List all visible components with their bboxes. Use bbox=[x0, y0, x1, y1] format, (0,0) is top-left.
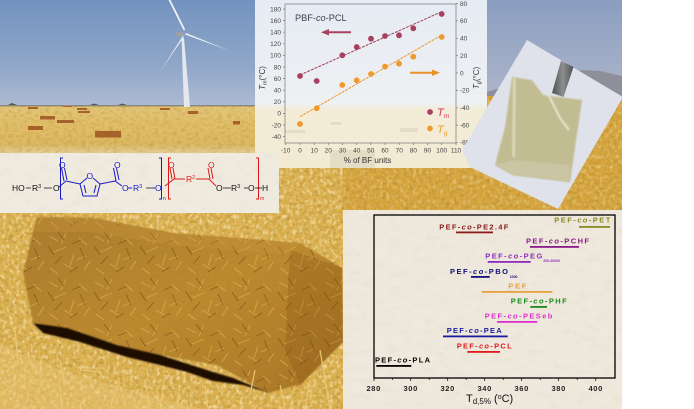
left axis labels: -20 bbox=[272, 122, 281, 129]
structure: right end group: 3 bbox=[237, 184, 240, 190]
legend: Tm: m bbox=[444, 113, 450, 120]
left axis labels: 40 bbox=[274, 88, 281, 94]
structure: left end group: O bbox=[53, 183, 60, 193]
right axis labels: 80 bbox=[460, 1, 468, 8]
x axis labels bbox=[281, 148, 462, 154]
structure: blue furan repeat unit: O bbox=[155, 183, 162, 193]
series: PEF-co-PHF: PEF-co-PHF bbox=[511, 296, 567, 305]
series: PEF-co-PEA bbox=[443, 326, 508, 337]
structure: right end group: O bbox=[248, 183, 255, 193]
structure: black bonds bbox=[26, 187, 248, 189]
left axis labels: 120 bbox=[270, 41, 281, 48]
legend: Tm bbox=[427, 107, 450, 120]
structure: left end group: HO bbox=[12, 183, 25, 193]
left axis labels: 160 bbox=[270, 18, 281, 25]
structure: right end group: O bbox=[216, 183, 223, 193]
x axis tick labels: 320 bbox=[441, 384, 455, 393]
legend: Tg: T bbox=[437, 124, 444, 136]
left axis labels: 20 bbox=[274, 99, 281, 106]
x axis labels: 10 bbox=[311, 148, 318, 154]
photo: lower straw ground bbox=[0, 168, 343, 409]
structure: red aliphatic repeat unit: O bbox=[208, 160, 215, 170]
structure: blue furan repeat unit bbox=[59, 158, 166, 202]
right axis labels: 20 bbox=[460, 53, 468, 60]
structure: red aliphatic repeat unit: 2 bbox=[192, 175, 195, 181]
data points: Tm bbox=[297, 11, 445, 84]
series: PEF-co-PESeb: PEF-co-PESeb bbox=[485, 312, 553, 321]
x axis labels: 0 bbox=[298, 148, 302, 154]
structure: right end group: H bbox=[262, 183, 268, 193]
right axis labels: 60 bbox=[460, 18, 468, 25]
photo: far field bbox=[0, 106, 256, 154]
structure: blue furan repeat unit: O bbox=[59, 160, 66, 170]
series: PEF-co-PLA: PEF-co-PLA bbox=[375, 355, 431, 364]
structure: left end group: R bbox=[32, 183, 38, 193]
x axis tick labels: 340 bbox=[478, 384, 492, 393]
structure: red aliphatic repeat unit: R bbox=[186, 174, 192, 184]
structure: left end group: 3 bbox=[38, 184, 41, 190]
structure: blue furan repeat unit: R bbox=[133, 183, 139, 193]
x axis tick labels: 280 bbox=[367, 384, 381, 393]
photo: right and middle field bbox=[343, 96, 622, 210]
clip holder bbox=[552, 61, 574, 97]
faint field marks bbox=[285, 122, 418, 168]
series: PEF-co-PE2.4F: PEF-co-PE2.4F bbox=[439, 222, 509, 231]
right axis labels: -60 bbox=[460, 122, 470, 129]
structure: blue furan repeat unit: O bbox=[114, 160, 121, 170]
panel: melting and glass transition chart bbox=[255, 0, 487, 168]
series: PEF-co-PEG: PEF-co-PEG bbox=[485, 251, 542, 260]
left axis title: (°C) bbox=[258, 66, 267, 80]
x axis labels: 90 bbox=[424, 148, 431, 154]
hay bale bbox=[20, 215, 345, 395]
x axis title: C) bbox=[502, 393, 513, 405]
series: PEF-co-PEG bbox=[485, 251, 560, 263]
x axis tick labels bbox=[367, 384, 603, 393]
x axis tick labels: 300 bbox=[404, 384, 418, 393]
x axis labels: 100 bbox=[436, 148, 448, 154]
series: PEF: PEF bbox=[508, 281, 527, 290]
x axis title: d,5% bbox=[473, 397, 491, 406]
structure: blue furan repeat unit: O bbox=[122, 183, 129, 193]
photo: horizon tree line bbox=[0, 103, 256, 106]
x axis title: T bbox=[466, 393, 473, 405]
x axis labels: 50 bbox=[367, 148, 375, 154]
left axis labels bbox=[270, 6, 281, 141]
left axis labels: 180 bbox=[270, 6, 281, 13]
x axis title: % of BF units bbox=[344, 156, 391, 165]
right axis labels: 0 bbox=[460, 70, 464, 77]
loose straw strokes bbox=[0, 330, 330, 409]
right axis labels bbox=[460, 1, 470, 147]
series: PEF-co-PBO: PEF-co-PBO bbox=[450, 267, 508, 276]
series: PEF-co-PEA: PEF-co-PEA bbox=[447, 326, 502, 335]
trend line: Tm bbox=[300, 12, 442, 75]
structure: left end group bbox=[12, 183, 60, 193]
photo: sky right bbox=[487, 0, 622, 100]
photo: sky left bbox=[0, 0, 256, 107]
x axis labels: 60 bbox=[381, 148, 389, 154]
left axis title: m bbox=[262, 80, 268, 85]
series: PEF-co-PEG: 200-20000 bbox=[543, 259, 560, 263]
right axis labels: -20 bbox=[460, 88, 470, 95]
wind turbine bbox=[160, 0, 229, 107]
left axis labels: 100 bbox=[270, 53, 281, 60]
x axis labels: 40 bbox=[353, 148, 361, 154]
x axis labels: 110 bbox=[451, 148, 462, 154]
chart title: PBF-co-PCL bbox=[295, 13, 347, 23]
legend: Tg: g bbox=[444, 130, 448, 137]
trend line: Tg bbox=[300, 35, 442, 117]
panel: copolymer chemical structure bbox=[0, 153, 279, 213]
left axis labels: -40 bbox=[272, 134, 281, 141]
arrow: to left axis bbox=[321, 29, 351, 36]
film bbox=[495, 77, 582, 182]
x axis labels: 70 bbox=[396, 148, 403, 154]
x axis labels: 20 bbox=[325, 148, 332, 154]
series: PEF-co-PCHF: PEF-co-PCHF bbox=[526, 237, 589, 246]
right axis labels: -80 bbox=[460, 140, 470, 147]
series: PEF bbox=[482, 281, 552, 293]
x axis title: ( bbox=[491, 393, 498, 405]
x axis title: o bbox=[498, 394, 502, 401]
structure: blue furan repeat unit: 3 bbox=[139, 184, 142, 190]
chart frame bbox=[283, 4, 458, 145]
x axis labels: 30 bbox=[339, 148, 346, 154]
structure: right end group bbox=[216, 183, 268, 193]
right axis title: (°C) bbox=[472, 67, 481, 81]
structure: red aliphatic repeat unit: O bbox=[168, 160, 175, 170]
x axis labels: 80 bbox=[410, 148, 417, 154]
left axis title: T bbox=[258, 84, 267, 90]
structure: blue furan repeat unit: n bbox=[163, 196, 166, 202]
x axis tick labels: 380 bbox=[552, 384, 566, 393]
left axis labels: 140 bbox=[270, 30, 281, 36]
panel: thermal stability range chart bbox=[343, 210, 622, 409]
left axis labels: 60 bbox=[274, 76, 281, 83]
right axis labels: 40 bbox=[460, 36, 468, 43]
structure: blue furan repeat unit: O bbox=[86, 171, 94, 181]
photo: distant mountains bbox=[487, 70, 622, 100]
structure: red aliphatic repeat unit bbox=[165, 158, 264, 202]
small hay bales bbox=[28, 106, 240, 138]
series: PEF-co-PET: PEF-co-PET bbox=[554, 216, 611, 225]
x axis labels: -10 bbox=[281, 148, 291, 154]
series: PEF-co-PCL: PEF-co-PCL bbox=[457, 341, 512, 350]
legend: Tm: T bbox=[437, 107, 444, 119]
bale shadow underside bbox=[33, 323, 267, 392]
series: PEF-co-PBO: 1000 bbox=[510, 275, 518, 279]
plot frame bbox=[374, 215, 615, 381]
structure: red aliphatic repeat unit: m bbox=[260, 196, 264, 202]
x axis tick labels: 360 bbox=[515, 384, 529, 393]
x axis tick labels: 400 bbox=[589, 384, 603, 393]
left axis labels: 0 bbox=[277, 111, 281, 118]
legend: Tg bbox=[427, 124, 448, 137]
left axis labels: 80 bbox=[274, 64, 281, 71]
right axis title: T bbox=[472, 83, 481, 89]
photo: polymer film sample bbox=[462, 40, 623, 209]
right axis title: g bbox=[476, 80, 482, 84]
arrow: to right axis bbox=[410, 70, 440, 76]
data points: Tg bbox=[297, 34, 445, 127]
structure: right end group: R bbox=[231, 183, 237, 193]
right axis labels: -40 bbox=[460, 105, 470, 112]
series: PEF-co-PBO bbox=[450, 267, 518, 279]
